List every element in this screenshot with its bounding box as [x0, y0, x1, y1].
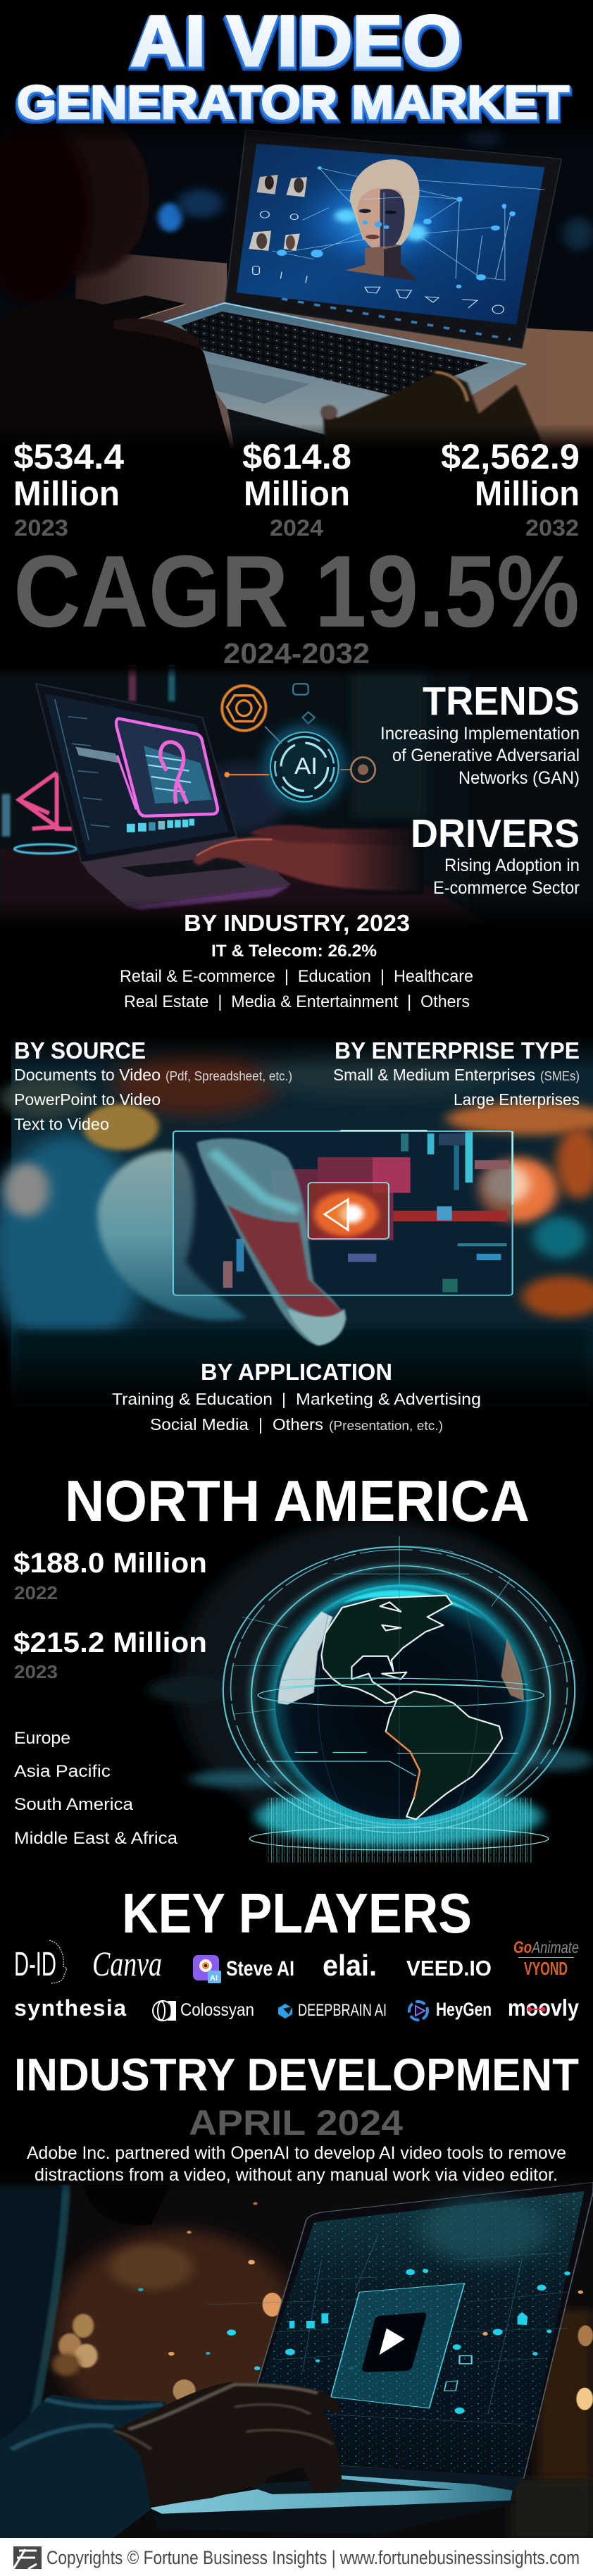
- other regions list: South America: [14, 1795, 134, 1814]
- other regions list: Middle East & Africa: [14, 1829, 178, 1848]
- typing hand: [113, 2382, 342, 2507]
- play panel: [331, 2284, 464, 2408]
- stat: 2024 market size: $614.8: [242, 437, 351, 476]
- logo: moovly: moovly: [508, 1995, 580, 2021]
- neon frame on screen: [116, 719, 218, 816]
- by source block: Text to Video: [14, 1115, 109, 1133]
- by source block: [14, 1037, 292, 1133]
- AI label in ring: AI: [294, 753, 318, 779]
- screen: [237, 144, 544, 340]
- trends block: [380, 679, 580, 788]
- other regions list: Asia Pacific: [14, 1762, 111, 1781]
- screen thumbnails: [249, 175, 307, 251]
- stat: 2023 market size: $534.4: [13, 437, 124, 476]
- by enterprise type block: (SMEs): [540, 1069, 580, 1083]
- by application block: Training & Education: [112, 1390, 273, 1408]
- by industry block: IT & Telecom: 26.2%: [211, 942, 377, 961]
- stat: 2024 market size: Million: [244, 475, 350, 513]
- key players heading: KEY PLAYERS: [122, 1882, 472, 1945]
- regional stat 2022: $188.0 Million: [13, 1548, 207, 1579]
- by industry block: Real Estate | Media & Entertainment | Others: [124, 992, 470, 1011]
- laptop lid: [225, 130, 561, 348]
- by source block: BY SOURCE: [14, 1037, 146, 1064]
- globe sphere: [270, 1581, 531, 1823]
- stat: 2032 market size: 2032: [525, 515, 579, 541]
- by source block: PowerPoint to Video: [14, 1090, 161, 1109]
- logo: Colossyan: Colossyan: [180, 2000, 254, 2020]
- hand: [98, 1150, 246, 1320]
- CAGR headline: 2024-2032: [223, 637, 370, 670]
- by application block: Others: [273, 1415, 323, 1434]
- image: hand typing on laptop with play icon: [0, 2167, 593, 2539]
- orange ring icon: [222, 686, 266, 731]
- AI ring: [263, 725, 346, 809]
- trackpad: [199, 362, 310, 404]
- logo: synthesia: synthesia: [14, 1995, 126, 2021]
- by application block: Social Media: [150, 1415, 249, 1434]
- logo: HeyGen: [409, 1999, 492, 2020]
- logo: GoAnimate Vyond: Animate: [530, 1938, 579, 1956]
- development description: [27, 2143, 566, 2185]
- table: [75, 249, 593, 449]
- drivers block: DRIVERS: [411, 811, 580, 856]
- app buttons: [127, 819, 194, 832]
- person silhouette: [0, 114, 231, 449]
- by application block: BY APPLICATION: [201, 1359, 392, 1385]
- logo: D-ID: D-ID: [14, 1946, 56, 1983]
- laptop screen: [208, 2182, 593, 2478]
- by enterprise type block: BY ENTERPRISE TYPE: [335, 1037, 580, 1064]
- by enterprise type block: Small & Medium Enterprises: [333, 1066, 535, 1084]
- desk: [0, 848, 492, 925]
- trends block: Networks (GAN): [458, 768, 580, 788]
- base glow: [249, 1787, 549, 1863]
- glowing play button: [308, 1183, 389, 1239]
- by enterprise type block: [333, 1037, 580, 1109]
- industry development heading: INDUSTRY DEVELOPMENT: [14, 2049, 579, 2100]
- logo: DeepBrain AI: [278, 2001, 387, 2020]
- laptop base: [164, 303, 526, 437]
- title: GENERATOR MARKET: [17, 76, 569, 129]
- stat: 2032 market size: [441, 437, 580, 541]
- sleeved arm and hoodie: [0, 2185, 170, 2538]
- footer logo: [13, 2546, 42, 2569]
- index finger: [177, 1138, 346, 1345]
- trends block: of Generative Adversarial: [392, 746, 580, 765]
- logo: GoAnimate Vyond: VYOND: [524, 1958, 568, 1979]
- development description: Adobe Inc. partnered with OpenAI to develop AI video tools to remove: [27, 2143, 566, 2163]
- front lip of laptop: [227, 409, 325, 449]
- footer bar: [0, 2538, 593, 2576]
- node glows: [277, 166, 516, 288]
- regional stat 2023: 2023: [14, 1661, 58, 1682]
- by source block: Documents to Video: [14, 1066, 161, 1084]
- by industry block: BY INDUSTRY, 2023: [184, 910, 410, 936]
- image: finger touching holographic video panel: [0, 1035, 593, 1403]
- logo: Steve AI: AI: [210, 1974, 218, 1983]
- logo: D-ID: [14, 1940, 67, 1983]
- regional stat 2022: [13, 1548, 207, 1603]
- stat: 2032 market size: $2,562.9: [441, 437, 580, 476]
- woman's face on screen: [345, 159, 420, 281]
- image: person at laptop with AI face on screen: [0, 114, 593, 450]
- logo: GoAnimate Vyond: Go: [513, 1938, 532, 1957]
- other regions list: Europe: [14, 1729, 70, 1748]
- equator rings: [258, 1678, 544, 1776]
- neon shape at left: [19, 772, 72, 829]
- by source block: (Pdf, Spreadsheet, etc.): [166, 1069, 292, 1083]
- image: glowing globe with the Americas: [147, 1520, 593, 1863]
- panel outline: [173, 1130, 513, 1295]
- regional stat 2023: $215.2 Million: [13, 1627, 207, 1658]
- logo: Steve AI: [193, 1955, 294, 1983]
- north america heading: NORTH AMERICA: [65, 1468, 530, 1534]
- by industry block: Retail & E-commerce | Education | Healthcare: [120, 967, 473, 986]
- logo: Colossyan: [153, 2000, 254, 2021]
- by application block: (Presentation, etc.): [329, 1419, 443, 1433]
- laptop base: [81, 837, 291, 906]
- keyboard: [181, 312, 489, 397]
- stat: 2023 market size: 2023: [14, 515, 68, 541]
- image: laptop with neon AI interface: [0, 667, 593, 930]
- regional stat 2022: 2022: [14, 1582, 58, 1603]
- stat: 2023 market size: [13, 437, 124, 541]
- title: [17, 1, 569, 129]
- screen dock icons: [253, 211, 504, 314]
- by enterprise type block: Large Enterprises: [454, 1090, 580, 1109]
- logo: GoAnimate Vyond: [513, 1938, 579, 1979]
- other regions list: [14, 1729, 178, 1848]
- logo: Canva: Canva: [92, 1944, 162, 1983]
- phone: [81, 295, 185, 322]
- by application block: [112, 1359, 481, 1434]
- drivers block: Rising Adoption in: [444, 856, 580, 875]
- laptop lid: [36, 684, 237, 863]
- stat: 2023 market size: Million: [13, 475, 120, 513]
- logo: DeepBrain AI: DEEPBRAIN AI: [298, 2001, 387, 2020]
- development description: distractions from a video, without any manual work via video editor.: [35, 2165, 558, 2185]
- logo: VEED.IO: VEED.IO: [406, 1956, 492, 1980]
- drivers block: [411, 811, 580, 898]
- title: AI VIDEO: [130, 1, 461, 81]
- stat: 2024 market size: [242, 437, 351, 541]
- connector lines: [224, 727, 375, 782]
- stat: 2024 market size: 2024: [270, 515, 323, 541]
- stat: 2032 market size: Million: [475, 475, 580, 513]
- hands: [193, 821, 423, 894]
- trends block: Increasing Implementation: [380, 724, 580, 744]
- trends block: TRENDS: [423, 679, 580, 724]
- by industry block: [120, 910, 473, 1011]
- by application block: |: [282, 1390, 286, 1408]
- logo: HeyGen: HeyGen: [436, 1999, 492, 2020]
- regional stat 2023: [13, 1627, 207, 1682]
- development date: APRIL 2024: [189, 2103, 403, 2143]
- by application block: Marketing & Advertising: [296, 1390, 481, 1408]
- by application block: |: [258, 1415, 263, 1434]
- laptop base: [149, 2465, 524, 2534]
- small floating icons: [293, 684, 315, 724]
- logo: Steve AI: Steve AI: [226, 1957, 294, 1980]
- outer rings: [223, 1536, 575, 1832]
- drivers block: E-commerce Sector: [433, 878, 580, 898]
- holographic panel fill: [174, 1132, 513, 1295]
- logo: elai: elai.: [323, 1949, 377, 1982]
- hand on laptop: [320, 370, 544, 449]
- continents: [321, 1596, 502, 1819]
